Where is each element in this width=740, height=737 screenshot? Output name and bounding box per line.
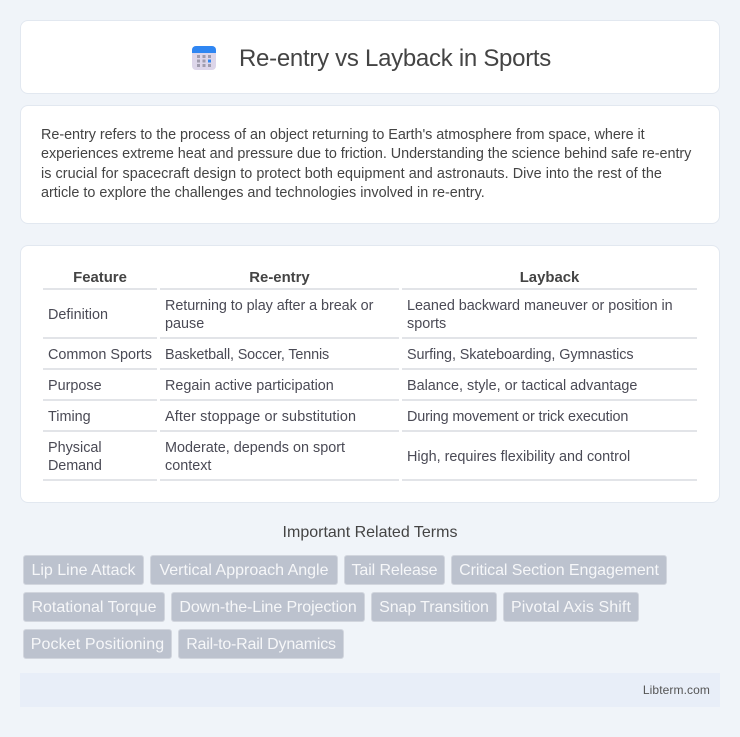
row: purpose: Balance, style, or tactical advantage — [407, 378, 637, 394]
row: definition: pause — [165, 316, 204, 332]
intro paragraph — [41, 127, 692, 201]
row: definition: sports — [407, 316, 446, 332]
row: timing: During movement or trick execution — [407, 409, 628, 425]
related term tags: Snap Transition — [379, 599, 489, 616]
row: common sports: Surfing, Skateboarding, Gymnastics — [407, 347, 634, 363]
intro paragraph: Re-entry refers to the process of an object returning to Earth's atmosphere from space, where it — [41, 127, 645, 143]
related term tags: Pocket Positioning — [31, 636, 164, 653]
intro paragraph: article to explore the challenges and technologies involved in re-entry. — [41, 185, 485, 201]
row: purpose — [48, 378, 637, 394]
related term tags: Critical Section Engagement — [459, 562, 659, 579]
table — [43, 270, 697, 481]
panel: header — [20, 20, 720, 94]
related term tags: Tail Release — [352, 562, 437, 579]
row: purpose: Purpose — [48, 378, 102, 394]
row: common sports — [48, 347, 634, 363]
table header: Feature — [73, 270, 127, 286]
row: definition — [48, 298, 673, 332]
row: physical demand: Moderate, depends on sport — [165, 440, 345, 456]
row: physical demand: context — [165, 458, 211, 474]
row: timing: After stoppage or substitution — [165, 409, 356, 425]
table header: Re-entry — [249, 270, 310, 286]
intro paragraph: experiences extreme heat and pressure due to friction. Understanding the science behind safe re-entry — [41, 146, 691, 162]
row: timing — [48, 409, 628, 425]
row: physical demand: High, requires flexibility and control — [407, 449, 630, 465]
table header — [73, 270, 580, 286]
row: physical demand: Demand — [48, 458, 102, 474]
panel: intro text — [20, 105, 720, 224]
table header: Layback — [520, 270, 579, 286]
title: Re-entry vs Layback in Sports — [239, 45, 551, 72]
footer — [20, 673, 720, 707]
heading: related terms: Important Related Terms — [283, 524, 457, 541]
row: purpose: Regain active participation — [165, 378, 334, 394]
intro paragraph: is crucial for spacecraft design to protect both equipment and astronauts. Dive into the rest of the — [41, 166, 662, 182]
related term tags: Vertical Approach Angle — [159, 562, 328, 579]
related term tags: Down-the-Line Projection — [179, 599, 357, 616]
row: definition: Leaned backward maneuver or position in — [407, 298, 673, 314]
panel: comparison table — [20, 245, 720, 503]
row: timing: Timing — [48, 409, 91, 425]
related term tags: Rail-to-Rail Dynamics — [186, 636, 336, 653]
footer brand: Libterm.com — [643, 683, 710, 697]
row: common sports: Basketball, Soccer, Tennis — [165, 347, 329, 363]
icon: calendar — [192, 46, 216, 70]
row: definition: Definition — [48, 307, 108, 323]
row: physical demand: Physical — [48, 440, 102, 456]
row: common sports: Common Sports — [48, 347, 152, 363]
related term tags — [23, 555, 667, 659]
row: physical demand — [48, 440, 630, 474]
row: definition: Returning to play after a break or — [165, 298, 373, 314]
related term tags: Rotational Torque — [31, 599, 157, 616]
related term tags: Pivotal Axis Shift — [511, 599, 631, 616]
related term tags: Lip Line Attack — [31, 562, 136, 579]
